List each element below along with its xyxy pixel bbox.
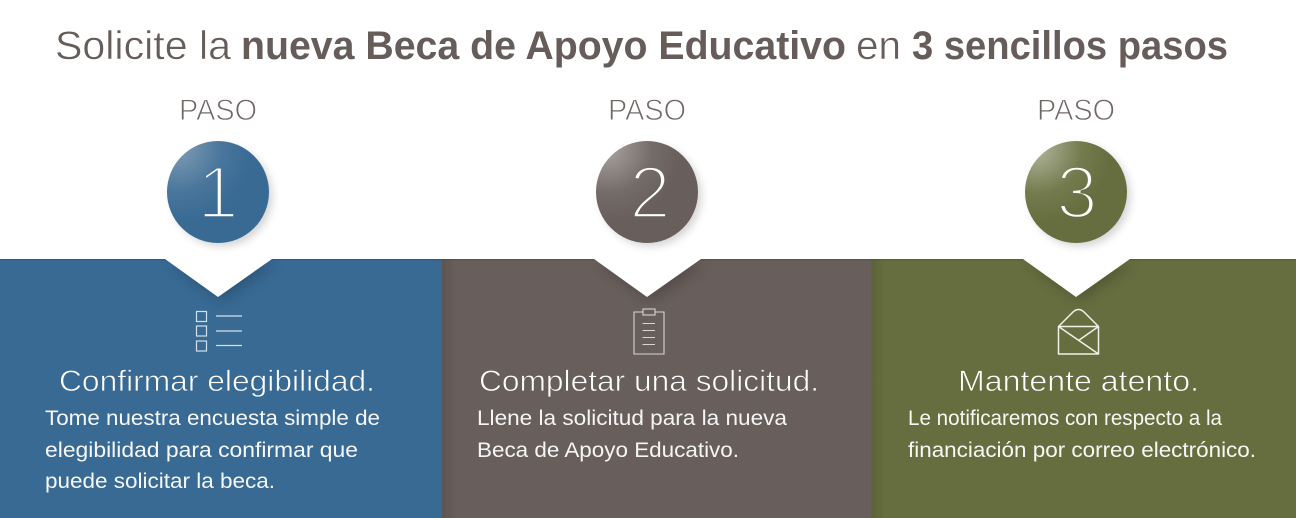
text: step 3: financiación por correo electrónico. (908, 439, 1256, 462)
heading: step 1: Confirmar elegibilidad. (59, 365, 375, 398)
badge: step 3: 3 (1056, 151, 1098, 234)
label: paso 1: PASO (179, 94, 257, 127)
heading: step 2: Completar una solicitud. (479, 365, 819, 398)
panel: step 2 (442, 259, 871, 518)
notch: step 2 (594, 259, 705, 301)
badge: step 2: 2 (629, 151, 671, 234)
badge: step 2 (596, 141, 701, 246)
label: paso 3: PASO (1037, 94, 1115, 127)
title: en (856, 24, 901, 68)
title: Solicite la (55, 24, 232, 68)
text: step 2: Llene la solicitud para la nueva (477, 407, 787, 430)
text: step 1: puede solicitar la beca. (45, 470, 275, 493)
icon: checklist (196, 312, 242, 351)
title: 3 sencillos pasos (912, 24, 1228, 68)
label: paso 2: PASO (608, 94, 686, 127)
panel: step 1 (0, 259, 442, 518)
heading: step 3: Mantente atento. (958, 365, 1199, 398)
text: step 2: Beca de Apoyo Educativo. (477, 439, 739, 462)
notch: step 1 (165, 259, 276, 301)
notch: step 3 (1023, 259, 1134, 301)
icon: clipboard (634, 309, 664, 354)
text: step 1: elegibilidad para confirmar que (45, 439, 358, 462)
text: step 1: Tome nuestra encuesta simple de (45, 407, 380, 430)
badge: step 3 (1025, 141, 1130, 246)
icon: open envelope (1058, 310, 1098, 354)
title: nueva Beca de Apoyo Educativo (241, 24, 846, 68)
text: step 3: Le notificaremos con respecto a la (908, 407, 1222, 430)
title (55, 24, 1228, 68)
text: step 3 (908, 407, 1256, 462)
badge: step 1 (167, 141, 272, 246)
panel: step 3 (871, 259, 1296, 518)
text: step 2 (477, 407, 787, 462)
text: step 1 (45, 407, 380, 493)
badge: step 1: 1 (197, 151, 239, 234)
